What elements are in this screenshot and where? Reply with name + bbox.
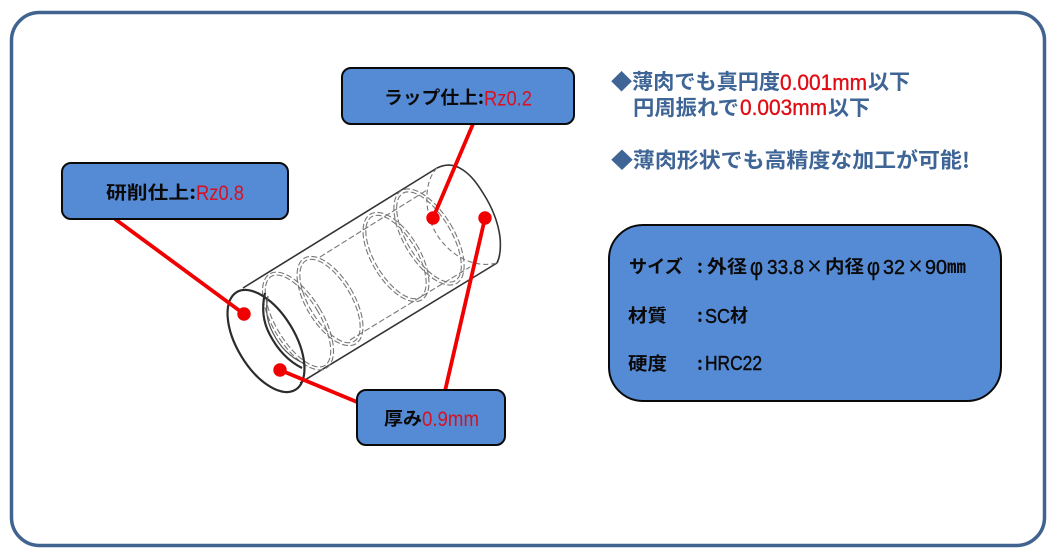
- spec: material: 材質: [628, 302, 667, 328]
- spec panel: [609, 225, 1001, 401]
- callout: grinding finish: [62, 163, 288, 219]
- callout: lap finish: ラップ仕上:: [384, 84, 484, 110]
- callout: thickness: 厚み: [384, 405, 422, 431]
- feature text: roundness and runout: 円周振れで: [633, 92, 739, 122]
- spec: size: 33.8: [767, 257, 804, 279]
- leader line: grinding finish: [115, 219, 251, 321]
- callout: lap finish: Rz0.2: [484, 88, 532, 110]
- spec: size: 90: [925, 257, 947, 279]
- spec: size: φ: [750, 254, 763, 281]
- spec: material: 材: [730, 302, 748, 328]
- spec: material: :: [697, 302, 703, 328]
- spec: hardness: :: [697, 350, 703, 376]
- spec: hardness: HRC22: [705, 353, 762, 375]
- feature text: roundness and runout: [611, 66, 910, 122]
- spec: hardness: [628, 350, 762, 376]
- callout: grinding finish: Rz0.8: [196, 182, 244, 205]
- spec: size: 内径: [825, 253, 864, 279]
- leader line: lap finish: [426, 124, 473, 225]
- spec: size: 外径: [707, 253, 747, 279]
- feature text: roundness and runout: 以下: [868, 66, 910, 96]
- feature text: roundness and runout: 0.003mm: [740, 95, 827, 120]
- leader line: thickness: [273, 363, 357, 402]
- spec: size: :: [697, 253, 703, 279]
- spec: size: ×: [907, 253, 924, 279]
- callout: thickness: [357, 390, 505, 445]
- spec: material: [628, 302, 748, 328]
- callout: thickness: 0.9mm: [422, 408, 479, 431]
- leader line: thickness to far end: [445, 211, 492, 391]
- tube drawing: [212, 165, 500, 405]
- spec: size: ×: [806, 253, 823, 279]
- spec: size: サイズ: [629, 253, 683, 279]
- spec: size: [629, 253, 966, 281]
- feature text: roundness and runout: ◆薄肉でも真円度: [611, 66, 780, 96]
- spec: size: φ: [867, 254, 880, 281]
- feature text: high precision: ◆薄肉形状でも高精度な加工が可能!: [611, 144, 970, 174]
- spec: size: ㎜: [947, 253, 966, 279]
- callout: grinding finish: 研削仕上:: [106, 179, 196, 205]
- feature text: roundness and runout: 0.001mm: [780, 70, 867, 95]
- spec: material: SC: [705, 306, 730, 328]
- callout: lap finish: [342, 68, 574, 124]
- spec: hardness: 硬度: [628, 350, 667, 376]
- spec: size: 32: [883, 257, 905, 279]
- feature text: roundness and runout: 以下: [828, 92, 870, 122]
